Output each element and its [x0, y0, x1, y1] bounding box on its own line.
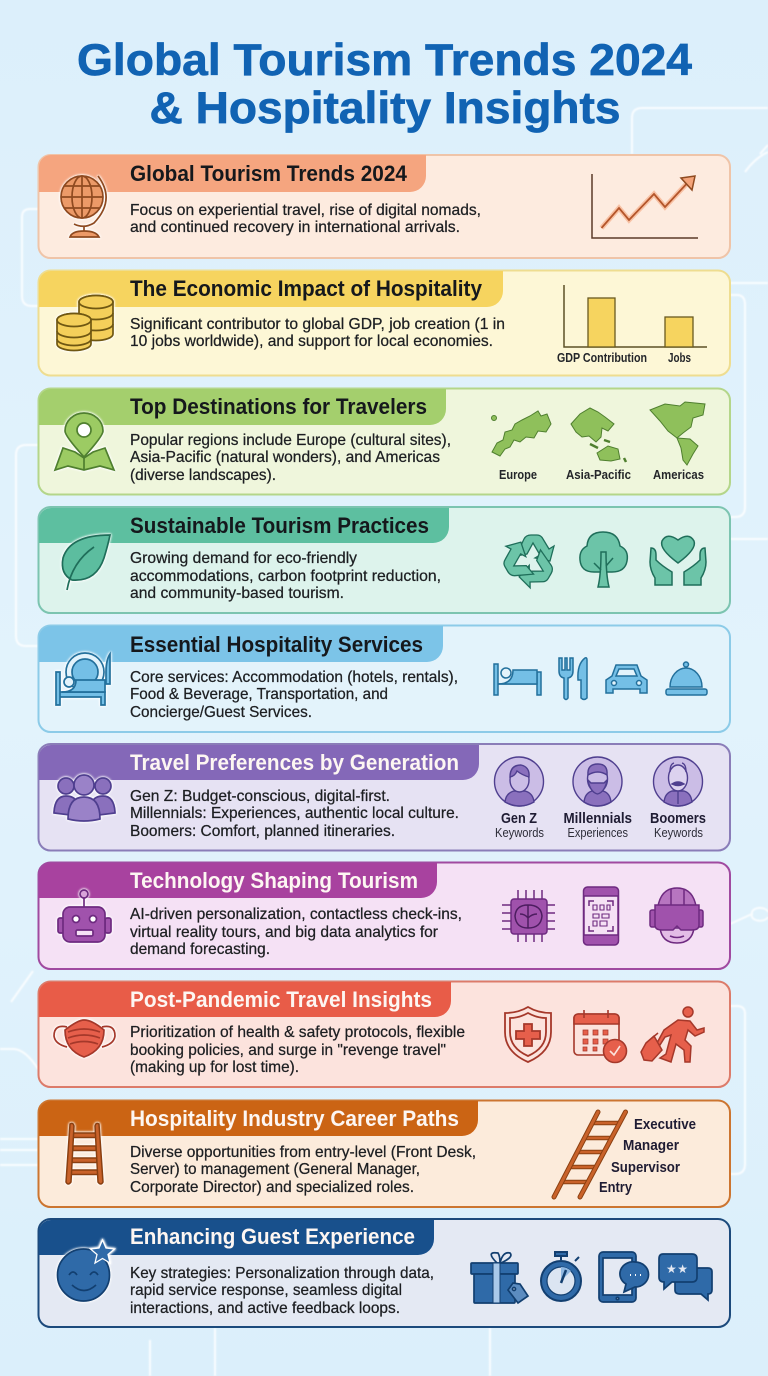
heading: Essential Hospitality Services — [130, 632, 423, 657]
body text — [130, 788, 459, 840]
heading: Sustainable Tourism Practices — [130, 513, 429, 538]
body text: Food & Beverage, Transportation, and — [130, 686, 388, 703]
heading: The Economic Impact of Hospitality — [130, 276, 482, 301]
body text — [130, 202, 481, 236]
avatar: Boomers: Boomers — [650, 810, 706, 827]
panel: top destinations — [38, 388, 730, 494]
heading: Travel Preferences by Generation — [130, 750, 459, 775]
title: & Hospitality Insights — [150, 84, 620, 133]
icon: smiley with star — [58, 1240, 114, 1301]
body text: demand forecasting. — [130, 941, 270, 958]
line chart — [592, 174, 698, 238]
body text: Gen Z: Budget-conscious, digital-first. — [130, 788, 390, 805]
icon: map pin — [55, 413, 114, 470]
icon: stopwatch — [541, 1252, 581, 1301]
heading: Post-Pandemic Travel Insights — [130, 987, 432, 1012]
icon: rating chat bubbles: ★★ — [666, 1262, 688, 1276]
map: Asia-Pacific — [566, 408, 631, 482]
map: Europe: Europe — [499, 468, 537, 482]
body text: Boomers: Comfort, planned itineraries. — [130, 823, 395, 840]
career ladder diagram: Executive — [634, 1116, 696, 1133]
avatar: Gen Z: Gen Z — [501, 810, 537, 827]
avatar: Gen Z — [494, 757, 544, 840]
body text: (diverse landscapes). — [130, 467, 276, 484]
body text: accommodations, carbon footprint reduction, — [130, 568, 441, 585]
avatar: Gen Z: Keywords — [495, 826, 544, 840]
heading: Top Destinations for Travelers — [130, 394, 427, 419]
avatar: Boomers — [650, 757, 706, 840]
icon: ladder — [66, 1123, 103, 1184]
icon: globe — [61, 176, 106, 237]
body text — [130, 550, 441, 602]
body text: Server) to management (General Manager, — [130, 1161, 420, 1178]
body text: Prioritization of health & safety protocols, flexible — [130, 1024, 465, 1041]
title: Global Tourism Trends 2024 — [77, 36, 692, 85]
icon: bed — [494, 664, 541, 695]
avatar: Boomers: Keywords — [654, 826, 703, 840]
panel: guest experience — [38, 1219, 730, 1327]
icon: coins — [57, 296, 113, 350]
icon: car — [606, 665, 647, 693]
body text — [130, 432, 451, 484]
body text — [130, 906, 462, 958]
body text: (making up for lost time). — [130, 1059, 299, 1076]
body text: rapid service response, seamless digital — [130, 1282, 402, 1299]
body text: Corporate Director) and specialized roles. — [130, 1179, 414, 1196]
body text: Growing demand for eco-friendly — [130, 550, 357, 567]
body text — [130, 669, 458, 721]
career ladder diagram: Supervisor — [611, 1159, 680, 1176]
panel: post-pandemic — [38, 982, 730, 1087]
career ladder diagram: Manager — [623, 1137, 679, 1154]
panel: technology — [38, 862, 730, 969]
panel: economic impact — [38, 270, 730, 376]
icon: tablet with chat bubble — [599, 1252, 649, 1302]
map: Americas — [650, 402, 705, 482]
panel: career paths — [38, 1100, 730, 1207]
icon: tree — [580, 532, 627, 587]
map: Europe — [492, 411, 551, 482]
avatar: Millennials: Millennials — [564, 810, 632, 827]
body text: Key strategies: Personalization through data, — [130, 1265, 434, 1282]
bar chart: GDP Contribution — [557, 351, 647, 365]
body text: Core services: Accommodation (hotels, rentals), — [130, 669, 458, 686]
body text: AI-driven personalization, contactless check-ins, — [130, 906, 462, 923]
icon: calendar with check — [574, 1010, 626, 1062]
body text — [130, 1024, 465, 1076]
body text: and continued recovery in international arrivals. — [130, 219, 460, 236]
icon: rating chat bubbles — [659, 1254, 712, 1300]
icon: health shield — [505, 1007, 551, 1062]
body text — [130, 1144, 476, 1196]
body text: Significant contributor to global GDP, job creation (1 in — [130, 316, 505, 333]
panel: global tourism trends — [38, 155, 730, 258]
panel: essential services — [38, 626, 730, 732]
heading: Enhancing Guest Experience — [130, 1224, 415, 1249]
career ladder diagram: Entry — [599, 1179, 633, 1196]
body text: Asia-Pacific (natural wonders), and Americas — [130, 449, 440, 466]
career ladder diagram — [554, 1112, 696, 1197]
panel: travel preferences by generation — [38, 744, 730, 850]
body text — [130, 1265, 434, 1317]
body text: Millennials: Experiences, authentic local culture. — [130, 805, 459, 822]
body text: Concierge/Guest Services. — [130, 704, 312, 721]
bar chart — [557, 285, 707, 365]
body text: virtual reality tours, and big data analytics for — [130, 924, 438, 941]
panel: sustainable tourism — [38, 507, 730, 613]
heading: Global Tourism Trends 2024 — [130, 161, 407, 186]
icon: hands and heart — [650, 536, 706, 585]
icon: leaf — [62, 535, 110, 590]
body text: and community-based tourism. — [130, 585, 344, 602]
icon: people group — [54, 775, 115, 821]
icon: recycle — [496, 535, 559, 593]
icon: service bell — [666, 662, 707, 695]
avatar: Millennials — [564, 757, 632, 840]
heading: Hospitality Industry Career Paths — [130, 1106, 459, 1131]
icon: bed and plate — [56, 653, 110, 705]
body text: Focus on experiential travel, rise of digital nomads, — [130, 202, 481, 219]
heading: Technology Shaping Tourism — [130, 868, 418, 893]
map: Americas: Americas — [653, 468, 704, 482]
body text: Diverse opportunities from entry-level (Front Desk, — [130, 1144, 476, 1161]
avatar: Millennials: Experiences — [568, 826, 628, 840]
body text: 10 jobs worldwide), and support for local economies. — [130, 333, 493, 350]
icon: gift with tag — [471, 1253, 528, 1303]
icon: traveller with suitcase — [641, 1007, 704, 1062]
icon: AI chip — [502, 890, 555, 942]
icon: phone with QR code — [584, 887, 618, 945]
title — [77, 36, 692, 133]
icon: fork and knife — [559, 658, 587, 700]
icon: VR headset — [650, 888, 703, 943]
body text: interactions, and active feedback loops. — [130, 1300, 400, 1317]
body text: Popular regions include Europe (cultural sites), — [130, 432, 451, 449]
bar chart: Jobs — [668, 351, 691, 365]
body text — [130, 316, 505, 350]
map: Asia-Pacific: Asia-Pacific — [566, 468, 631, 482]
body text: booking policies, and surge in "revenge travel" — [130, 1042, 446, 1059]
icon: face mask — [54, 1020, 115, 1057]
icon: robot — [58, 890, 111, 942]
